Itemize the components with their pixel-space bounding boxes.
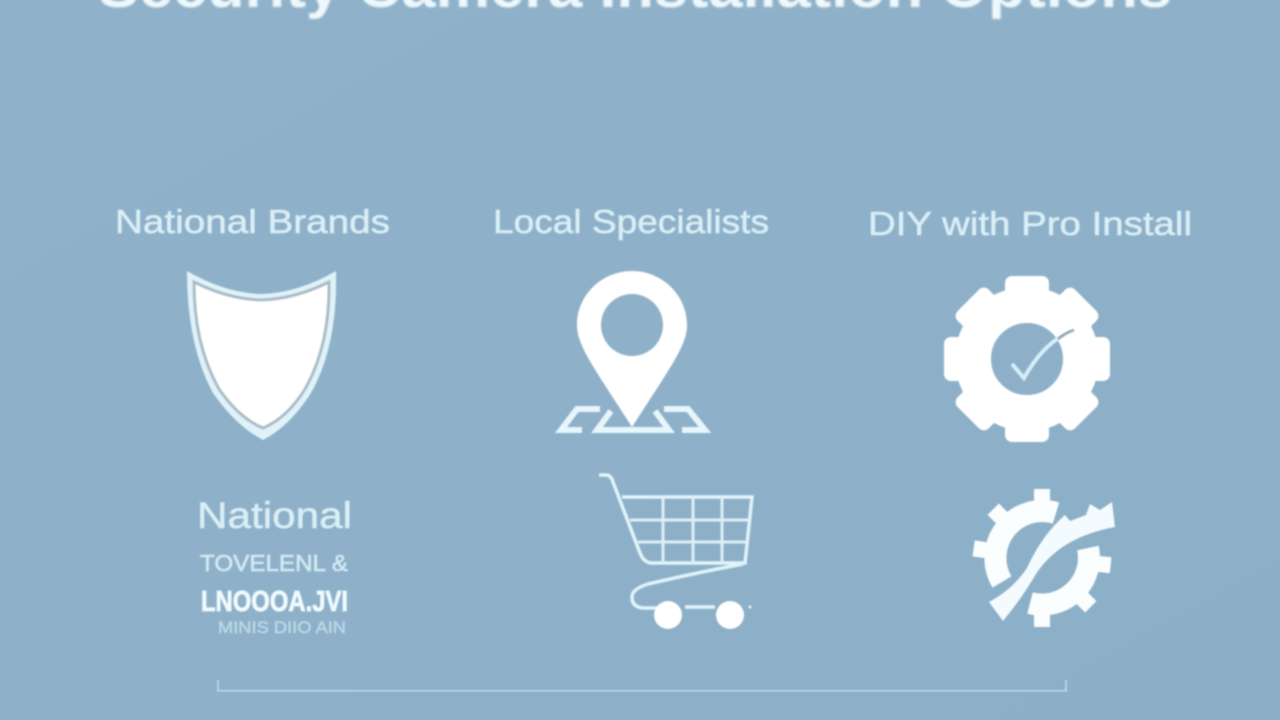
- icon: gear with wrench slash: [973, 489, 1115, 627]
- label: National: National: [197, 495, 352, 536]
- gear ring: [973, 305, 1081, 413]
- slash: [989, 502, 1115, 621]
- icon: map pin: [561, 271, 705, 430]
- icon: shopping cart: [599, 475, 752, 629]
- icon: shield: [187, 271, 336, 440]
- wheels: [654, 601, 682, 629]
- map base: [561, 409, 705, 430]
- gear teeth: [973, 489, 1111, 627]
- cart frame: [599, 475, 752, 563]
- line: bold caption: LNOOOA.JVI: [201, 586, 348, 618]
- checkmark: [1012, 335, 1064, 378]
- bottom bracket line: [218, 680, 1066, 691]
- line: fine print: MINIS DIIO AIN: [218, 618, 346, 637]
- cart chassis: [632, 564, 743, 608]
- line: small caption: TOVELENL &: [200, 550, 348, 576]
- gear teeth: [944, 276, 1110, 442]
- upper-left gear piece: [995, 511, 1056, 582]
- heading: DIY with Pro Install: DIY with Pro Install: [868, 205, 1192, 242]
- icon: gear with checkmark: [944, 276, 1110, 442]
- text block: National: [197, 495, 352, 637]
- pin: [577, 271, 687, 427]
- heading: National Brands: National Brands: [115, 203, 390, 240]
- lower-right gear piece: [1030, 548, 1089, 605]
- cart grid: [630, 497, 750, 563]
- heading: Local Specialists: Local Specialists: [493, 203, 769, 240]
